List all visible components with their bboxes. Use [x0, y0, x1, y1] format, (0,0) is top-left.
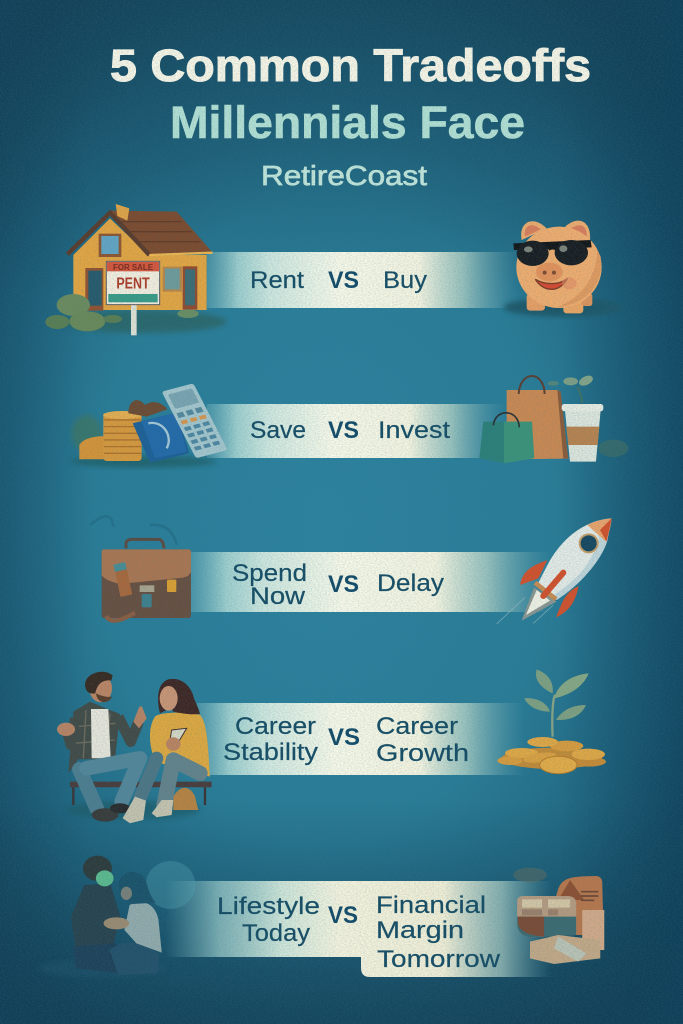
label: Career Growth: Growth: [376, 740, 469, 767]
icon: house with for sale sign: [45, 204, 227, 335]
icon: bag, wallet and cash box: [513, 868, 604, 964]
label: Career Stability: Career: [235, 713, 316, 740]
row 3: spend now vs delay: [190, 552, 552, 612]
row 2: save vs invest: [207, 404, 505, 458]
icon: rocket: [497, 518, 612, 624]
woman: [123, 679, 210, 823]
label: Career Stability: Stability: [223, 739, 318, 766]
label: Lifestyle Today: Today: [242, 920, 310, 947]
row 2 banner: [207, 404, 505, 458]
icon: couple talking: [57, 672, 212, 823]
vs: VS: [328, 902, 358, 929]
label: Financial Margin Tomorrow: Tomorrow: [377, 946, 501, 973]
label: Rent: Rent: [250, 267, 304, 294]
vs: VS: [328, 267, 359, 294]
label: Delay: Delay: [377, 570, 444, 597]
label: Financial Margin Tomorrow: Margin: [376, 917, 464, 944]
row 1 banner: [207, 252, 519, 308]
row 5 banner: [165, 881, 552, 977]
row 3 banner: [190, 552, 552, 612]
icon: coins, book and calculator: [70, 383, 228, 468]
title: [110, 40, 591, 191]
row 5: lifestyle today vs financial margin tomorrow: [165, 881, 552, 977]
title line 1: 5 Common Tradeoffs: [110, 40, 591, 91]
label: Financial Margin Tomorrow: Financial: [376, 892, 486, 919]
label: Career Growth: Career: [376, 713, 458, 740]
label: Spend Now: Spend: [232, 560, 307, 587]
man: [57, 672, 147, 822]
icon: piggy bank with sunglasses: [503, 221, 623, 317]
label: Save: Save: [250, 417, 306, 444]
label: Spend Now: Now: [250, 583, 306, 610]
vs: VS: [328, 417, 359, 444]
row 4 banner: [197, 703, 525, 775]
icon: house with for sale sign: FOR SALE: [113, 263, 154, 272]
vs: VS: [328, 571, 359, 598]
icon: couple with clock: [38, 856, 195, 978]
icon: house with for sale sign: PENT: [116, 276, 150, 293]
label: Lifestyle Today: Lifestyle: [217, 893, 320, 920]
icon: shopping bags and coffee cup: [479, 374, 628, 463]
vs: VS: [328, 724, 360, 751]
label: Buy: Buy: [383, 267, 427, 294]
title line 2: Millennials Face: [170, 97, 525, 148]
icon: plant growing from coins: [497, 669, 606, 774]
brand name: RetireCoast: [261, 160, 427, 191]
label: Invest: Invest: [378, 417, 450, 444]
row 1: rent vs buy: [207, 252, 519, 308]
row 4: career stability vs career growth: [197, 703, 525, 775]
icon: briefcase: [90, 516, 191, 621]
